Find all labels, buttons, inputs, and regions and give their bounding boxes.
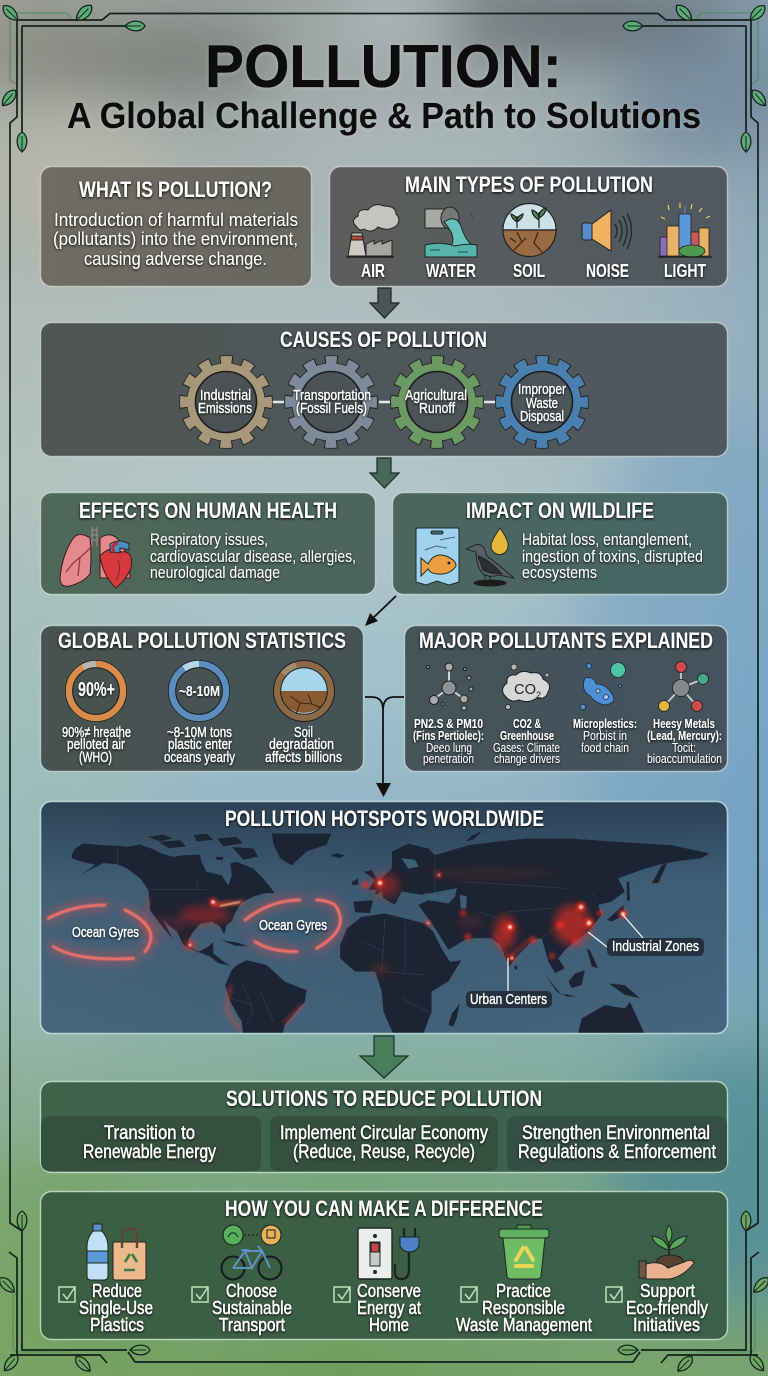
map: Americas and Greenland — [72, 833, 345, 1038]
text: definition: Introduction of harmful materials — [54, 209, 298, 230]
text: wildlife effects: ingestion of toxins, disrupted — [522, 548, 703, 566]
gear: agricultural runoff — [395, 360, 479, 444]
labels: causes: Disposal — [520, 408, 564, 425]
labels: actions: Choose — [226, 1281, 277, 1301]
panel: what is pollution — [40, 166, 312, 286]
card: circular economy: Implement Circular Economy — [280, 1123, 488, 1144]
panel: effects on human health — [40, 492, 376, 594]
card: regulations: Strengthen Environmental — [522, 1123, 710, 1144]
icon: heavy metals molecule — [658, 662, 708, 712]
text: wildlife effects: Habitat loss, entanglement, — [522, 531, 692, 549]
card: regulations: Regulations & Enforcement — [518, 1142, 717, 1163]
heading: effects: EFFECTS ON HUMAN HEALTH — [79, 498, 337, 523]
heading: hotspots: POLLUTION HOTSPOTS WORLDWIDE — [225, 806, 544, 831]
labels: actions: Eco-friendly — [626, 1298, 708, 1318]
panel: global pollution statistics — [40, 626, 364, 772]
gear: improper waste disposal — [500, 360, 584, 444]
panel: impact on wildlife — [392, 492, 728, 594]
labels: pollution types: NOISE — [586, 261, 629, 281]
icon: bicycle with route — [222, 1225, 282, 1280]
icon: hand holding plant — [639, 1225, 694, 1279]
heading: main types: MAIN TYPES OF POLLUTION — [405, 172, 653, 197]
labels: statistics: ~8-10M tons — [167, 724, 232, 741]
labels: actions: Conserve — [357, 1281, 421, 1301]
icon: CO2 cloud: CO — [514, 681, 536, 698]
labels: statistics: oceans yearly — [164, 749, 235, 766]
labels: statistics: (WHO) — [79, 749, 112, 766]
map: ocean gyre swirls — [42, 890, 351, 970]
panel: how you can make a difference — [40, 1192, 728, 1340]
labels: statistics: 90%≠ hreathe — [62, 724, 131, 741]
labels: statistics — [62, 724, 342, 766]
icon: CO2 cloud — [502, 664, 550, 710]
labels: pollution types: SOIL — [513, 261, 545, 281]
labels: causes: Emissions — [198, 400, 252, 417]
label: urban centers callout: Urban Centers — [470, 991, 547, 1008]
labels: actions: Waste Management — [456, 1315, 592, 1335]
icon: noise speaker — [582, 210, 632, 251]
labels: actions: Practice — [496, 1281, 551, 1301]
label: industrial zones callout — [588, 915, 704, 956]
labels: causes: Transportation — [293, 387, 371, 404]
icon: oil drop — [491, 528, 508, 555]
labels: statistics: pelloted air — [67, 736, 125, 753]
text: wildlife effects: ecosystems — [522, 564, 597, 582]
text: definition: (pollutants) into the environment, — [53, 228, 298, 249]
panel: major pollutants explained — [404, 626, 728, 772]
labels: actions: Home — [369, 1315, 409, 1335]
heading: solutions: SOLUTIONS TO REDUCE POLLUTION — [226, 1086, 542, 1111]
labels: actions: Initiatives — [633, 1315, 700, 1335]
icon: soil circle — [503, 204, 556, 256]
labels: pollutants: bioaccumulation — [647, 752, 722, 766]
gear: transportation — [289, 360, 373, 444]
labels: pollutants: CO2 & — [513, 717, 541, 731]
text: wildlife effects — [522, 531, 703, 582]
labels: statistics: degradation — [269, 736, 334, 753]
card: renewable energy: Transition to — [104, 1123, 195, 1144]
labels: causes: Waste — [526, 395, 558, 412]
labels: actions: Reduce — [92, 1281, 142, 1301]
labels: statistics: plastic enter — [168, 736, 232, 753]
labels: actions: Transport — [219, 1315, 285, 1335]
labels: pollutants: Porbist in — [583, 729, 627, 743]
chart: plastic ring: ~8-10M — [179, 684, 220, 700]
labels: actions: Single-Use — [79, 1298, 153, 1318]
panel: pollution hotspots map — [40, 802, 768, 1038]
icon: water pollution pipe — [425, 207, 477, 257]
panel: main types of pollution — [330, 166, 728, 286]
labels: statistics: Soil — [294, 724, 313, 741]
labels: pollutants: Microplestics: — [573, 717, 637, 731]
heading: difference: HOW YOU CAN MAKE A DIFFERENCE — [225, 1196, 543, 1221]
arrow: causes to effects — [370, 458, 399, 488]
card: regulations — [507, 1116, 727, 1171]
text: health effects — [150, 531, 356, 582]
labels: causes: (Fossil Fuels) — [296, 400, 367, 417]
card: circular economy — [270, 1116, 498, 1171]
labels: pollution types: WATER — [426, 261, 476, 281]
chart: soil degradation ring — [274, 660, 334, 722]
labels: pollution types: LIGHT — [664, 261, 706, 281]
labels: statistics: affects billions — [265, 749, 342, 766]
labels: causes: Improper — [518, 381, 566, 398]
label: urban centers callout — [466, 958, 552, 1008]
labels: pollutants: Tocit: — [672, 741, 696, 755]
gear: industrial emissions — [184, 360, 268, 444]
heading: what is pollution: WHAT IS POLLUTION? — [79, 177, 272, 202]
labels: actions: Energy at — [357, 1298, 421, 1318]
labels: pollution types — [361, 261, 706, 281]
labels: causes — [198, 381, 566, 425]
labels: pollutants: change drivers — [494, 752, 560, 766]
labels: pollutants: Deeo lung — [426, 741, 472, 755]
label: ocean gyres west: Ocean Gyres — [72, 924, 139, 941]
labels: actions: Support — [640, 1281, 695, 1301]
icon: light pollution city — [658, 203, 712, 257]
title: POLLUTION: — [205, 33, 562, 100]
card: circular economy: (Reduce, Reuse, Recycle) — [293, 1142, 475, 1163]
labels: actions — [79, 1281, 708, 1335]
icon: microplastics — [580, 662, 626, 710]
text: definition — [53, 209, 298, 269]
arrow: converging connector to map — [365, 697, 404, 797]
text: health effects: Respiratory issues, — [150, 531, 268, 549]
icon: bird with oil — [466, 544, 514, 586]
label: ocean gyres atlantic: Ocean Gyres — [259, 917, 327, 934]
labels: pollutants: Gases: Climate — [493, 741, 560, 755]
icon: recycling bin — [499, 1225, 549, 1279]
map: Eurasia, Africa, Oceania — [340, 830, 710, 1038]
labels: actions: Responsible — [482, 1298, 565, 1318]
icon: plastic bag with fish — [416, 528, 459, 585]
labels: pollution types: AIR — [361, 261, 385, 281]
icon: bottle and bag — [87, 1224, 146, 1280]
labels: pollutants: penetration — [423, 752, 474, 766]
icon: lungs and heart — [60, 527, 132, 588]
labels: pollutants: food chain — [581, 741, 629, 755]
map: red glow hotspots — [142, 866, 627, 1030]
labels: actions: Sustainable — [212, 1298, 292, 1318]
labels: pollutants: PN2.S & PM10 — [414, 717, 483, 731]
labels: causes: Runoff — [419, 400, 456, 417]
heading: wildlife: IMPACT ON WILDLIFE — [466, 498, 654, 523]
arrow: map to solutions — [360, 1036, 408, 1078]
text: definition: causing adverse change. — [84, 248, 267, 269]
icon: particulate molecule — [426, 663, 473, 710]
panel: solutions to reduce pollution — [40, 1082, 728, 1172]
icon: light switch and plug — [358, 1228, 419, 1279]
card: renewable energy: Renewable Energy — [83, 1142, 216, 1163]
heading: causes: CAUSES OF POLLUTION — [280, 327, 487, 352]
labels: causes: Industrial — [200, 387, 251, 404]
panel: causes of pollution — [40, 322, 728, 456]
labels: pollutants: (Lead, Mercury): — [647, 729, 722, 743]
card: renewable energy — [41, 1116, 261, 1171]
heading: statistics: GLOBAL POLLUTION STATISTICS — [58, 628, 346, 653]
labels: pollutants: Heesy Metals — [653, 717, 715, 731]
checkboxes — [59, 1287, 622, 1302]
icon: CO2 cloud: 2 — [536, 690, 541, 700]
text: health effects: cardiovascular disease, allergies, — [150, 548, 356, 566]
chart: 90 percent ring — [66, 660, 126, 722]
chart: plastic ring — [168, 660, 230, 722]
arrow: types to causes — [370, 288, 399, 318]
labels: causes: Agricultural — [405, 387, 467, 404]
labels: actions: Plastics — [90, 1315, 144, 1335]
labels: pollutants: (Fins Pertiolec): — [413, 729, 484, 743]
labels: pollutants: Greenhouse — [500, 729, 554, 743]
arrow: wildlife to statistics — [365, 596, 396, 626]
icon: air pollution factory — [346, 205, 399, 257]
labels: pollutants — [413, 717, 722, 766]
label: industrial zones callout: Industrial Zones — [612, 938, 699, 955]
title — [67, 33, 701, 136]
text: health effects: neurological damage — [150, 564, 280, 582]
chart: 90 percent ring: 90%+ — [78, 679, 115, 701]
title: A Global Challenge & Path to Solutions — [67, 95, 701, 136]
